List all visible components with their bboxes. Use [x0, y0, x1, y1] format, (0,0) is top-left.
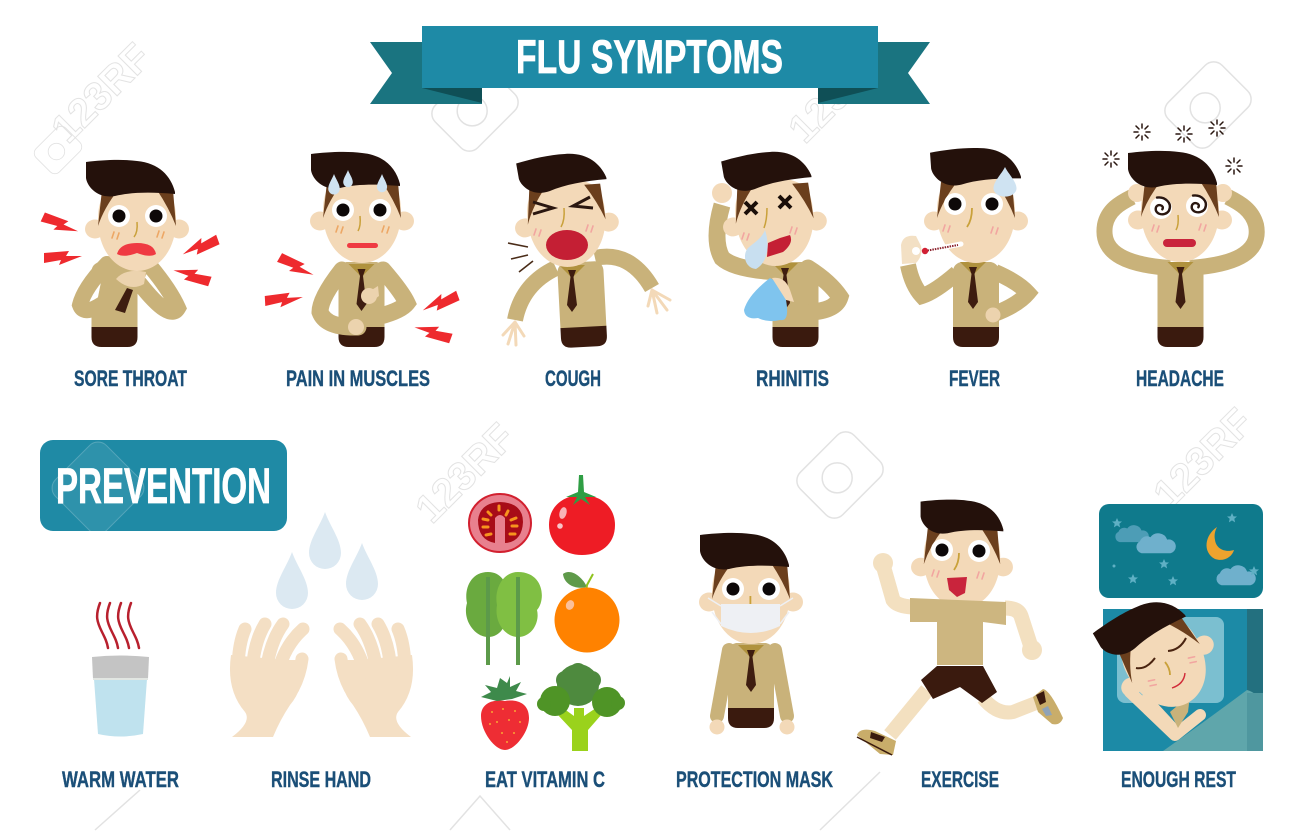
bed panel	[1103, 609, 1263, 751]
water drops	[276, 512, 378, 609]
dizzy sparks	[1103, 120, 1242, 174]
label: rinse hand: RINSE HAND	[271, 767, 371, 792]
strawberry	[481, 676, 529, 750]
face mask	[708, 598, 793, 633]
label: fever: FEVER	[949, 366, 1000, 391]
tomato half	[469, 494, 531, 552]
sweat drops	[328, 170, 387, 195]
blanket	[1163, 690, 1263, 751]
title banner	[370, 26, 930, 104]
watermark: background stamps: 123RF	[43, 35, 159, 151]
label: rhinitis: RHINITIS	[756, 366, 829, 391]
prevention heading: PREVENTION	[56, 458, 271, 514]
sweat drop	[993, 167, 1017, 197]
symptom: fever	[901, 144, 1028, 347]
prevention: protection mask	[699, 533, 803, 734]
label: enough rest: ENOUGH REST	[1121, 767, 1236, 792]
watermark: background stamps: 123RF	[407, 415, 523, 531]
symptom: headache	[1103, 120, 1257, 347]
steam	[97, 603, 139, 648]
shoes	[857, 689, 1063, 755]
prevention: vitamin c foods	[466, 475, 625, 751]
shirt	[910, 598, 1006, 665]
watermark: background stamps: 123RF	[780, 35, 896, 151]
thermometer	[922, 244, 961, 254]
symptom: sore throat	[40, 160, 220, 347]
nose drip	[745, 230, 768, 269]
prevention: exercise	[857, 500, 1063, 755]
right hand	[337, 624, 413, 737]
prevention: rinse hand	[230, 512, 413, 737]
prevention heading	[40, 437, 287, 539]
prevention: enough rest	[1092, 504, 1263, 751]
label: warm water: WARM WATER	[62, 767, 179, 792]
night sky panel	[1099, 504, 1263, 598]
whole tomato	[549, 475, 615, 555]
title text: FLU SYMPTOMS	[516, 30, 783, 83]
pain bolts	[265, 251, 460, 345]
label: exercise: EXERCISE	[921, 767, 999, 792]
shorts	[921, 666, 997, 703]
label: protection mask: PROTECTION MASK	[676, 767, 833, 792]
broccoli	[537, 663, 625, 751]
label: pain in muscles: PAIN IN MUSCLES	[286, 366, 430, 391]
label: sore throat: SORE THROAT	[74, 366, 187, 391]
prevention: warm water	[92, 603, 149, 736]
glass	[92, 656, 149, 736]
label: cough: COUGH	[545, 366, 601, 391]
label: headache: HEADACHE	[1136, 366, 1224, 391]
label: eat vitamin c: EAT VITAMIN C	[485, 767, 605, 792]
symptom: cough	[503, 147, 670, 348]
tissue	[744, 278, 787, 321]
symptom: pain in muscles	[265, 152, 460, 347]
left hand	[230, 624, 306, 737]
spinach leaves	[466, 572, 542, 665]
orange	[554, 572, 620, 652]
cough lines	[508, 243, 533, 272]
symptom: rhinitis	[712, 145, 840, 347]
pain bolts	[40, 211, 220, 288]
sleeping arms	[1130, 692, 1200, 735]
watermark: background stamps: 123RF	[1145, 400, 1261, 516]
